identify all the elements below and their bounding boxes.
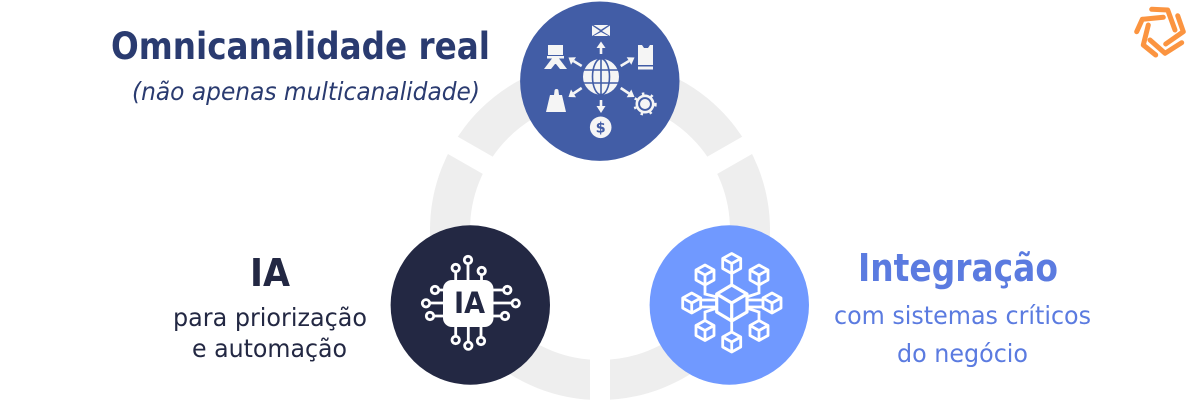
icon: connectors bbox=[702, 273, 762, 332]
text: para priorização e automação: e automação bbox=[192, 334, 347, 363]
text: com sistemas críticos do negócio: do negócio bbox=[897, 339, 1028, 368]
icon: dollar coin bbox=[590, 116, 612, 138]
text: com sistemas críticos do negócio bbox=[834, 301, 1091, 368]
node: omnichannel circle with globe icon bbox=[520, 2, 680, 161]
logo: orange pentagonal knot bbox=[1137, 9, 1183, 55]
icon: outer cubes bbox=[683, 254, 781, 352]
heading: Integração: Integração bbox=[858, 246, 1058, 290]
icon: gear bbox=[634, 94, 656, 114]
text: para priorização e automação bbox=[173, 303, 367, 363]
ring: grey cycle of three segments bbox=[440, 80, 760, 400]
icon: smartphone bbox=[638, 45, 653, 70]
icon: envelope bbox=[592, 25, 610, 36]
icon: circuit traces bbox=[422, 256, 519, 349]
icon: globe bbox=[583, 58, 619, 95]
icon: chip body bbox=[443, 280, 494, 327]
icon: arrows radiating from globe bbox=[568, 42, 634, 113]
heading: IA: IA bbox=[250, 251, 291, 295]
text: não apenas multicanalidade: (não apenas multicanalidade) bbox=[132, 77, 480, 106]
icon: shopping bag bbox=[546, 89, 566, 112]
node: AI circle with chip icon bbox=[391, 225, 550, 385]
node: integration circle with cube network icon bbox=[650, 225, 809, 385]
icon label: IA: IA bbox=[454, 286, 486, 320]
icon: storefront bbox=[544, 45, 567, 69]
icon: dollar coin: $ bbox=[596, 120, 606, 136]
text: com sistemas críticos do negócio: com sistemas críticos bbox=[834, 301, 1091, 330]
icon: central cube bbox=[717, 285, 747, 321]
heading: Omnicanalidade real: Omnicanalidade real bbox=[111, 25, 490, 68]
text: para priorização e automação: para priorização bbox=[173, 303, 367, 332]
